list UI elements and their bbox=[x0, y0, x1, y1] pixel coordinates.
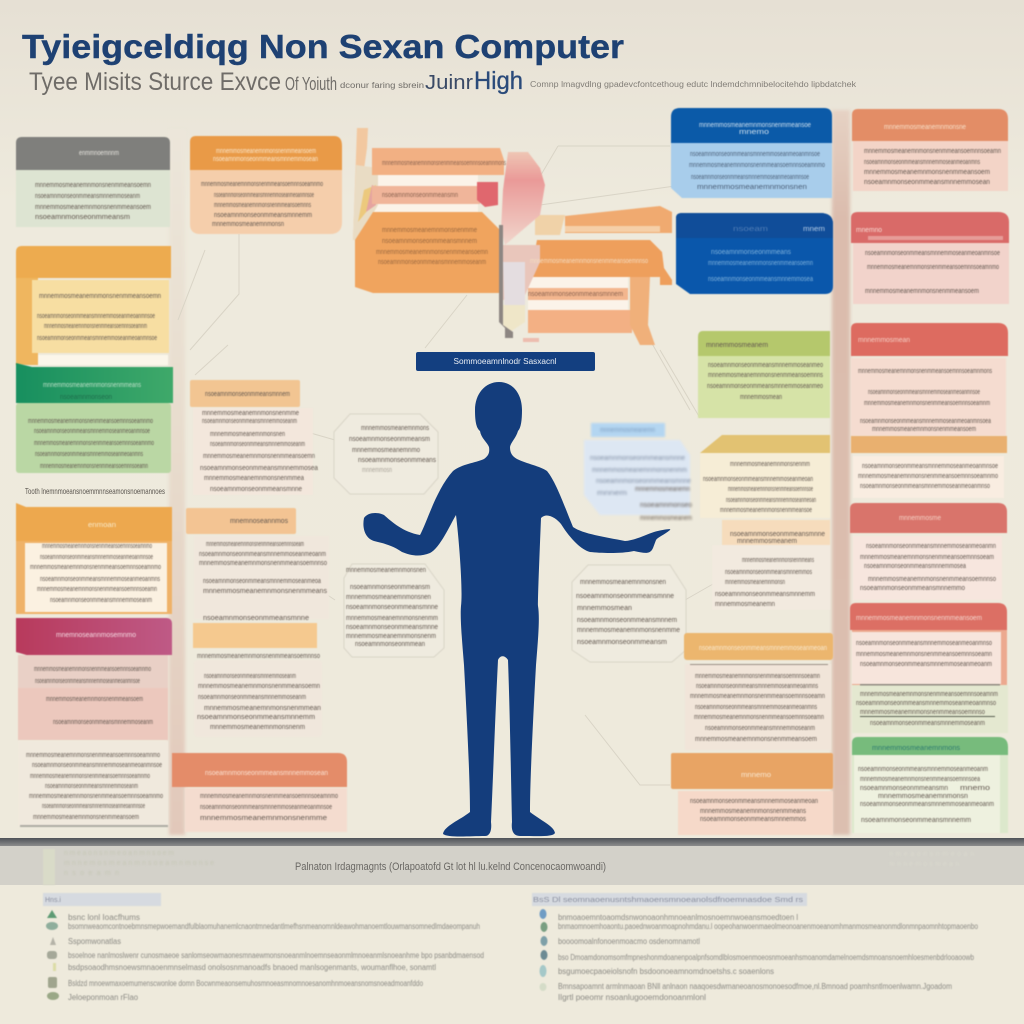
subtitle: Of Yoiuth bbox=[285, 74, 337, 94]
panel: far right salmon: nsoeamnmonseonmmeansmnnemmosean bbox=[864, 179, 990, 186]
panel: far right green: mnnemmosmeanemnmonsnenmmeansoemnnsoea bbox=[860, 776, 980, 783]
panel: left column cream: mnnemmosmeanemnmonsnenmmeansoemnnsoeamnmo bbox=[26, 752, 160, 759]
bar text: mnnemmosmeanemnmonsnenmmeansoemnnsoeamnmons bbox=[382, 160, 506, 167]
blue label bbox=[416, 352, 595, 371]
panel: right blue top bbox=[671, 108, 832, 198]
panel: left column yellow: nsoeamnmonseonmmeansmnnemmoseanmeoanmnsoe bbox=[37, 313, 155, 320]
list lines: bsoelnoe nanlmoslwenr cunosmaeoe sanlomseowmaonesmnaewmonsnoeanmlnoemnseaonmlmnoeanmlsnoeanhme bpo psanbdmaensod bbox=[68, 951, 484, 960]
panel: far right red three: nsoeamnmonseonmmeansmnnemmosea bbox=[864, 563, 966, 570]
bar text: nsoeamnmonseonmmeansmn bbox=[382, 192, 458, 199]
panel: left column yellow bbox=[16, 246, 171, 365]
panel: far right red four bbox=[850, 603, 1008, 733]
panel: left column cream bbox=[18, 741, 168, 827]
ghost text in band: nmeaonsnmeoan bbox=[889, 851, 974, 858]
panel: right orange bottom: nsoeamnmonseonmmeansmnnemmoseanmeoan bbox=[690, 798, 818, 805]
panel: second column note one: nsoeamnmonseonmmeansmnnem bbox=[205, 391, 290, 398]
panel: left column orange: mnnemmosmeanemnmonsnenmmeansoemnnsoeamn bbox=[37, 586, 157, 593]
panel: left column crimson: nsoeamnmonseonmmeansmnnemmoseanm bbox=[53, 719, 153, 726]
white bands bbox=[372, 175, 628, 310]
panel: left column green: nsoeamnmonseon bbox=[60, 394, 112, 401]
panel: far right salmon: mnnemmosmeanemnmonsnenmmeansoem bbox=[864, 169, 990, 176]
panel: right blue second: nsoeamnmonseonmmeans bbox=[711, 249, 791, 256]
panel: left column green: mnnemmosmeanemnmonsnenmmeans bbox=[43, 382, 141, 389]
panel: far right red four: nsoeamnmonseonmmeansmnnemmoseanmeoanm bbox=[860, 661, 992, 668]
panel: right blue top: nsoeamnmonseonmmeansmnnemmoseanmeoanmnsoe bbox=[691, 174, 809, 181]
bar text: mnnemmosmeanemnmonsnenmmeansoemn bbox=[376, 249, 488, 256]
callout: blue smudge: mnnemmosmeanem bbox=[640, 515, 692, 522]
callout: lower left: mnnemmosmeanemnmonsnen bbox=[346, 567, 426, 574]
panel: left column green: mnnemmosmeanemnmonsnenmmeansoemnnsoeamnmo bbox=[28, 418, 153, 425]
bar text: nsoeamnmonseonmmeansmnnem bbox=[382, 238, 477, 245]
list lines: Jeloeponmoan rFlao bbox=[68, 993, 139, 1002]
panel: second column note two: nsoeamnmonseonmmeansmnnemmoseanmeoa bbox=[203, 578, 321, 585]
left tab edge bbox=[353, 128, 368, 240]
panel: left column orange: mnnemmosmeanemnmonsnenmmeansoemnnsoeamnmo bbox=[42, 543, 152, 550]
list header: Hns.i bbox=[45, 897, 61, 904]
panel: second column note two: nsoeamnmonseonmmeansmnnemmoseanmeoanm bbox=[199, 551, 326, 558]
bar text: nsoeamnmonseonmmeansmnnem bbox=[528, 291, 623, 298]
panel: second column note one: mnnemmosmeanemnmonsnenmmea bbox=[204, 475, 304, 482]
panel: left column gray bbox=[16, 137, 170, 227]
panel: left column crimson: mnnemmosmeanemnmonsnenmmeansoem bbox=[46, 696, 143, 703]
pink splash spine bbox=[501, 152, 545, 245]
callout: blue smudge bbox=[584, 423, 692, 522]
panel: right green: nsoeamnmonseonmmeansmnnemmoseanmeo bbox=[707, 383, 823, 390]
panel: left column yellow: mnnemmosmeanemnmonsnenmmeansoemnnsoeamnm bbox=[44, 323, 147, 330]
bar text: mnnemmosmeanemnmonsnenmme bbox=[382, 227, 477, 234]
panel: far right red four: mnnemmosmeanemnmonsnenmmeansoemnnso bbox=[860, 709, 985, 716]
panel: second column note three: nsoeamnmonseonmmeansmnnemmoseanm bbox=[204, 673, 296, 680]
list lines: bsdpsoaodhmsnoewsmnaoenmnselmasd onolsosnmanoadfs bnaoed manlsogenmants, woumanflhoe, sonamtl bbox=[68, 963, 436, 972]
callout: upper left: mnnemmosn bbox=[362, 467, 392, 474]
callout: lower right: mnnemmosmean bbox=[577, 605, 632, 612]
spine bbox=[499, 225, 513, 338]
bar text bbox=[376, 160, 648, 298]
panel: second column note one: mnnemmosmeanemnmonsnenmme bbox=[202, 410, 299, 417]
subtitle: Tyee Misits Sturce Exvce bbox=[29, 68, 281, 96]
panel: left column green: mnnemmosmeanemnmonsnenmmeansoemnnsoeamn bbox=[40, 463, 148, 470]
callout: blue smudge: nsoeamnmonseonmmeansmnne bbox=[596, 478, 691, 485]
subtitle: Comnp lmagvdlng gpadevcfontcethoug edutc lndemdchmnibelocitehdo lipbdatchek bbox=[530, 80, 857, 89]
list header: BsS Dl seomnaoenusntshmaoensmnoeanolsdfnoemnasdoe Smd rs bbox=[533, 897, 804, 904]
panel: far right red four: nsoeamnmonseonmmeansmnnemmoseanmeoanmnso bbox=[856, 640, 992, 647]
panel: right orange notes bbox=[684, 633, 833, 750]
panel: right green: mnnemmosmeanem bbox=[706, 342, 768, 349]
panel: right orange notes: nsoeamnmonseonmmeansmnnemmoseanmeoanmns bbox=[695, 704, 817, 711]
subtitle bbox=[29, 67, 857, 96]
callout: lower left: nsoeamnmonseonmmeansmnne bbox=[346, 604, 438, 611]
panel: right cream stack: mnnemmosmeanemnmonsnenmmeans bbox=[742, 557, 814, 564]
callout: blue smudge: nsoeamnmonseo bbox=[640, 502, 692, 509]
panel: right blue top: mnemo bbox=[739, 129, 769, 136]
panel: far right salmon: mnnemmosmeanemnmonsne bbox=[884, 124, 966, 131]
panel: second column orange: mnnemmosmeanemnmonsnenmmeansoemnns bbox=[214, 202, 311, 209]
panel: right green: mnnemmosmean bbox=[740, 394, 782, 401]
panel: second column orange: nsoeamnmonseonmmeansmnnemm bbox=[214, 212, 312, 219]
callout: blue smudge: mnnemmosmeanemn bbox=[635, 486, 690, 493]
panel: left column orange: enmoan bbox=[88, 522, 116, 529]
panel: far right green: mnemo bbox=[960, 785, 990, 792]
panel: left column green: nsoeamnmonseonmmeansmnnemmoseanmeoanmns bbox=[35, 451, 143, 458]
panel: right cream stack: mnnemmosmeanem bbox=[737, 538, 797, 545]
panel: left column cream: mnnemmosmeanemnmonsnenmmeansoemnnsoeamnmo bbox=[30, 773, 150, 780]
central orange flow diagram bbox=[353, 128, 672, 345]
panel: second column note three: mnnemmosmeanemnmonsnenm bbox=[210, 724, 305, 731]
panel: right yellow: mnnemmosmeanemnmonsnenmmeansoemnnsoe bbox=[728, 486, 813, 493]
panel: far right red three: nsoeamnmonseonmmeansmnnemmo bbox=[860, 585, 965, 592]
callout: blue smudge: nsoeamnmonseonmmeansmnne bbox=[590, 455, 685, 462]
panel: second column bottom: nsoeamnmonseonmmeansmnnemmosean bbox=[205, 770, 328, 777]
panel: left column green: nsoeamnmonseonmmeansmnnemmoseanmeoanmnsoe bbox=[34, 428, 150, 435]
panel: left column crimson: nsoeamnmonseonmmeansmnnemmoseanmeoanmnsoe bbox=[35, 678, 140, 685]
panel: far right red four: nsoeamnmonseonmmeansmnnemmoseanmeoanmnso bbox=[856, 700, 996, 707]
panel: second column bottom: mnnemmosmeanemnmonsnenmme bbox=[200, 815, 327, 822]
bottom left list bbox=[43, 893, 484, 1002]
panel: right cream stack: nsoeamnmonseonmmeansmnne bbox=[730, 531, 825, 538]
panel: right orange notes: nsoeamnmonseonmmeansmnnemmoseanmeoanmns bbox=[696, 683, 818, 690]
ghost text in band: nsoeamn bbox=[64, 870, 119, 877]
list header bbox=[532, 893, 807, 906]
panel: left column orange: nsoeamnmonseonmmeansmnnemmoseanmeoanmns bbox=[40, 576, 160, 583]
panel: right orange notes: mnnemmosmeanemnmonsnenmmeansoemnnsoeamn bbox=[690, 693, 825, 700]
list lines: Ilgrtl poeomr nsoanlugooemdonoanmlonl bbox=[558, 993, 706, 1002]
list lines: Bmnsapoamnt armlnmaoan BNll anlnaon naaqoesdwmaneoanosmonoesodfmoe,nl.Bmnoad poamhsntlmoenlwamn.Jgoadom bbox=[558, 982, 952, 991]
subtitle: Juinr bbox=[425, 72, 473, 94]
panel: right green bbox=[698, 331, 830, 418]
callout: upper left: mnnemmosmeanemnmo bbox=[352, 447, 420, 454]
panel: right orange notes: mnnemmosmeanemnmonsnenmmeansoemnnsoeamn bbox=[694, 714, 824, 721]
panel: left column orange: mnnemmosmeanemnmonsnenmmeansoemnnsoeamnmo bbox=[30, 564, 161, 571]
bar text: mnnemmosmeanemnmonsnenmmeansoemnnso bbox=[530, 258, 648, 265]
panel: right cream stack: nsoeamnmonseonmmeansmnnemm bbox=[715, 591, 815, 598]
right main bar bbox=[530, 240, 672, 285]
panel: second column orange: mnnemmosmeanemnmonsnenmmeansoem bbox=[216, 148, 316, 155]
panel: second column note three: mnnemmosmeanemnmonsnenmmeansoemn bbox=[198, 683, 320, 690]
band caption: Palnaton Irdagmagnts (Orlapoatofd Gt lot hl lu.kelnd Concenocaomwoandi) bbox=[295, 861, 606, 873]
panel: far right red one: mnnemmosmeanemnmonsnenmmeansoem bbox=[865, 288, 979, 295]
vertical connector strips bbox=[169, 110, 850, 835]
panel: left column cream: nsoeamnmonseonmmeansmnnemmoseanmeoanmnsoe bbox=[32, 762, 162, 769]
panel: far right red three bbox=[850, 503, 1007, 600]
panel: far right red four: mnnemmosmeanemnmonsnenmmeansoem bbox=[856, 615, 982, 622]
list lines: Sspomwonatlas bbox=[68, 937, 121, 946]
panel: right orange notes: mnnemmosmeanemnmonsnenmmeansoemnnsoeamn bbox=[695, 673, 820, 680]
panel: second column note two: nsoeamnmonseonmmeansmnne bbox=[203, 615, 309, 622]
panel: right blue second: mnem bbox=[803, 226, 825, 233]
panel: second column note one: nsoeamnmonseonmmeansmnnemmosea bbox=[200, 465, 318, 472]
panel: right blue second: mnnemmosmeanemnmonsnenmmeansoemn bbox=[708, 260, 813, 267]
panel: far right red four: nsoeamnmonseonmmeansmnnemmoseanm bbox=[870, 720, 985, 727]
panel: left column crimson bbox=[16, 618, 172, 740]
panel: far right red one bbox=[851, 212, 1009, 304]
panel: left column cream: mnnemmosmeanemnmonsnenmmeansoem bbox=[33, 814, 139, 821]
list lines: bsomnweaomcontnoebmnsmepwoemandfulblaomuhanemlcnaontmnedantlmefhsnmeanomnldeawohmanoemtlouwmansomnedlmdaeompanuh bbox=[68, 922, 480, 931]
panel: right orange bottom: nsoeamnmonseonmmeansmnnemmos bbox=[700, 816, 806, 823]
panel: right orange notes: nsoeamnmonseonmmeansmnnemmoseanm bbox=[705, 725, 815, 732]
panel: far right green bbox=[852, 737, 1008, 833]
panel: left column orange: nsoeamnmonseonmmeansmnnemmoseanmeoanmnsoe bbox=[40, 554, 153, 561]
callout: lower left: nsoeamnmonseonmmean bbox=[355, 641, 425, 648]
right upper bar bbox=[565, 206, 672, 233]
panel: far right red two bbox=[851, 323, 1008, 436]
list header bbox=[43, 893, 161, 906]
panel: second column note three: nsoeamnmonseonmmeansmnnemm bbox=[197, 714, 315, 721]
panel: left column gray: nsoeamnmonseonmmeansm bbox=[35, 214, 130, 221]
panel: left column orange bbox=[16, 503, 172, 614]
panel: far right red four: mnnemmosmeanemnmonsnenmmeansoemnnsoeamn bbox=[856, 651, 992, 658]
panel: second column orange: nsoeamnmonseonmmeansmnnemmosean bbox=[213, 156, 318, 163]
panel: right orange notes: nsoeamnmonseonmmeansmnnemmoseanmeoan bbox=[699, 645, 827, 652]
callout: lower right: nsoeamnmonseonmmeansm bbox=[577, 639, 667, 646]
panel: second column note three: mnnemmosmeanemnmonsnenmmeansoemnnso bbox=[197, 653, 320, 660]
callout: lower left: mnnemmosmeanemnmonsnenmm bbox=[346, 615, 438, 622]
callout: lower left: nsoeamnmonseonmmeansmnne bbox=[346, 624, 438, 631]
floor band bbox=[0, 838, 1024, 885]
title: Tyieigceldiqg Non Sexan Computer bbox=[22, 28, 624, 65]
callout: lower right: mnnemmosmeanemnmonsnenmme bbox=[577, 627, 680, 634]
panel: right blue second: nsoeam bbox=[733, 226, 768, 233]
callout: upper left: nsoeamnmonseonmmeansm bbox=[349, 436, 430, 443]
callout: lower left: nsoeamnmonseonmmeansm bbox=[350, 584, 430, 591]
bottom right list bbox=[532, 893, 978, 1002]
panel: right orange bottom bbox=[671, 753, 833, 835]
panel: right yellow: mnnemmosmeanemnmonsnenmmeansoe bbox=[720, 507, 812, 514]
panel: left column gray: mnnemmosmeanemnmonsnenmmeansoemn bbox=[35, 182, 151, 189]
callout: lower left bbox=[344, 564, 444, 657]
list lines: bsgumoecpaoeiolsnofn bsdoonoeamnomdnoetshs.c soaenlons bbox=[558, 967, 774, 976]
panel: left column gray: nsoeamnmonseonmmeansmnnemmoseanm bbox=[35, 193, 140, 200]
connector lines bbox=[178, 146, 720, 785]
panel: far right green: nsoeamnmonseonmmeansmn bbox=[860, 785, 948, 792]
panel: left column cream: nsoeamnmonseonmmeansmnnemmoseanm bbox=[45, 783, 138, 790]
callout: blue smudge: mnnemmosmeanemn bbox=[600, 427, 655, 434]
panel: far right green: nsoeamnmonseonmmeansmnnemm bbox=[861, 817, 971, 824]
panel: second column note one: nsoeamnmonseonmmeansmnne bbox=[210, 486, 302, 493]
panel: far right green: mnnemmosmeanemnmons bbox=[872, 745, 961, 752]
panel: far right green: nsoeamnmonseonmmeansmnnemmoseanmeoanm bbox=[858, 766, 988, 773]
panel: second column note two: mnnemmosmeanemnmonsnenmmeans bbox=[203, 588, 327, 595]
list lines: bsnc lonl Ioacfhums bbox=[68, 913, 140, 922]
panel: right yellow: nsoeamnmonseonmmeansmnnemmoseanmeoan bbox=[703, 476, 813, 483]
panel: right blue second bbox=[676, 213, 833, 294]
panel: second column orange: nsoeamnmonseonmmeansmnnemmoseanmeoanmnsoe bbox=[214, 192, 314, 199]
panel: left column gray: enmmnoemnnm bbox=[79, 150, 119, 157]
panel: left column orange: nsoeamnmonseonmmeansmnnemmoseanm bbox=[50, 597, 152, 604]
panel: right blue top: mnnemmosmeanemnmonsnenmmeansoemnnsoeamnmo bbox=[689, 162, 825, 169]
panel: right cream stack bbox=[712, 520, 830, 610]
panel: second column bottom: nsoeamnmonseonmmeansmnnemmoseanmeoanmnsoe bbox=[200, 804, 332, 811]
panel: far right red three: mnnemmosme bbox=[899, 515, 941, 522]
panel: far right red two: mnnemmosmeanemnmonsnenmmeansoem bbox=[872, 426, 976, 433]
panel: right blue top: mnnemmosmeanemnmonsnen bbox=[697, 184, 807, 191]
panel: second column note one: mnnemmosmeanemnmonsnenmmeansoemn bbox=[203, 453, 315, 460]
panel: left column cream: nsoeamnmonseonmmeansmnnemmoseanmeoanmnsoe bbox=[42, 803, 145, 810]
panel: second column note three bbox=[193, 623, 322, 737]
callout: upper left: mnnemmosmeanemnmons bbox=[361, 425, 429, 432]
subtitle: High bbox=[474, 67, 523, 95]
panel: right orange notes: mnnemmosmeanemnmonsnenmmeansoem bbox=[695, 736, 817, 743]
panel: second column bottom: mnnemmosmeanemnmonsnenmmeansoemnnsoeamnmo bbox=[200, 793, 338, 800]
list lines: Bsldzd mnoewmaxoemumenscwonloe domn Bocwnmeaonsemuhosmnoeasmnomnoesanomhnmoeansnomsnoeadmoanfddo bbox=[68, 979, 423, 988]
panel: right blue top: nsoeamnmonseonmmeansmnnemmoseanmeoanmnsoe bbox=[690, 151, 820, 158]
panel: left column yellow: mnnemmosmeanemnmonsnenmmeansoemn bbox=[39, 293, 161, 300]
panel: right blue top: mnnemmosmeanemnmonsnenmmeansoe bbox=[699, 122, 811, 129]
panel: right blue second: nsoeamnmonseonmmeansmnnemmosea bbox=[708, 276, 813, 283]
bar text: nsoeamnmonseonmmeansmnnemmoseanm bbox=[378, 259, 486, 266]
panel: second column note one: mnnemmosmeanemnmonsnen bbox=[210, 431, 285, 438]
callout: blue smudge: mnnem bbox=[597, 490, 627, 497]
panel: second column note one: nsoeamnmonseonmmeansmnnemmoseanm bbox=[202, 418, 297, 425]
panel: right yellow: nsoeamnmonseonmmeansmnnemmoseanmeoan bbox=[726, 497, 816, 504]
panel: second column note two: mnnemmosmeanemnmonsnenmmeansoemnnso bbox=[199, 560, 327, 567]
panel: left column cream: mnnemmosmeanemnmonsnenmmeansoemnnsoeamnmo bbox=[29, 793, 163, 800]
panel: far right red three: mnnemmosmeanemnmonsnenmmeansoemnnso bbox=[868, 576, 996, 583]
list lines: boooomoalnfonoenmoacmo osdenomnamotl bbox=[558, 937, 700, 946]
panel: right orange bottom: mnnemo bbox=[741, 772, 771, 779]
panel: right green: nsoeamnmonseonmmeansmnnemmoseanmeo bbox=[708, 362, 823, 369]
list icons bbox=[540, 909, 548, 991]
panel: second column note two: mnnemmosmeanemnmonsnenmmeansoemnnsoeam bbox=[206, 541, 304, 548]
panel: far right red one: mnemno bbox=[856, 227, 882, 234]
panel: right cream stack: mnnemmosmeanemnmonsn bbox=[725, 579, 785, 586]
panel: far right green: nsoeamnmonseonmmeansmnnemmoseanmeoanm bbox=[860, 801, 994, 808]
callout: lower right bbox=[572, 565, 686, 662]
panel: right orange bottom: mnnemmosmeanemnmonsnenmmeans bbox=[700, 808, 806, 815]
panel: right cream stack: mnnemmosmeanemn bbox=[715, 601, 775, 608]
ghost text in band: mnnemosmeanmnsoeamnmonse bbox=[64, 860, 214, 867]
top bar bbox=[372, 148, 504, 175]
blue label: Sommoeamnlnodr Sasxacnl bbox=[454, 357, 557, 366]
left column caption: Tooth lnemnmoeansnoemmnnseamonsnoemannoes bbox=[25, 486, 165, 496]
list icons bbox=[46, 910, 59, 1000]
panel: right yellow: mnnemmosmeanemnmonsnenmm bbox=[730, 461, 810, 468]
right leg bbox=[630, 277, 655, 345]
panel: second column note two bbox=[186, 508, 329, 622]
panel: left column crimson: mnnemmosmeanemnmonsnenmmeansoemnnsoeamnmo bbox=[34, 666, 151, 673]
main orange block bbox=[355, 212, 500, 293]
panel: far right salmon bbox=[852, 109, 1008, 191]
panel: second column note one bbox=[190, 380, 318, 495]
panel: left column gray: mnnemmosmeanemnmonsnenmmeansoem bbox=[35, 204, 151, 211]
human silhouette bbox=[363, 382, 670, 836]
subtitle: dconur faring sbrein bbox=[340, 81, 424, 90]
panel: left column yellow: nsoeamnmonseonmmeansmnnemmoseanmeoanmnsoe bbox=[37, 335, 157, 342]
panel: left column crimson: mnemnoseannmosemnmo bbox=[56, 632, 136, 639]
panel: far right red three: mnnemmosmeanemnmonsnenmmeansoemnnsoeam bbox=[860, 554, 994, 561]
panel: second column note one: nsoeamnmonseonmmeansmnnemmoseanm bbox=[210, 441, 305, 448]
callout: lower left: mnnemmosmeanemnmonsnenm bbox=[346, 633, 436, 640]
callout: lower left: mnnemmosmeanemnmonsnen bbox=[346, 594, 431, 601]
panel: right green: mnnemmosmeanemnmonsnenmmeansoemnns bbox=[708, 372, 823, 379]
callout: lower right: nsoeamnmonseonmmeansmnnem bbox=[577, 617, 677, 624]
panel: far right green: mnnemmosmeanemnmonsn bbox=[878, 793, 968, 800]
ghost text in band: nmeaonsnmeoanmnsoem bbox=[64, 850, 174, 857]
list lines bbox=[558, 913, 978, 1002]
panel: right cream stack: nsoeamnmonseonmmeansmnnemmos bbox=[725, 569, 812, 576]
panel: second column orange bbox=[190, 136, 342, 234]
panel: second column note three: nsoeamnmonseonmmeansmnnemmoseanm bbox=[198, 694, 306, 701]
panel: second column bottom bbox=[172, 753, 347, 832]
panel: second column note two: mnemnoseannmos bbox=[230, 518, 288, 525]
callout: lower right: mnnemmosmeanemnmonsnen bbox=[580, 579, 666, 586]
panel: right yellow bbox=[700, 435, 830, 518]
panel: left column green bbox=[16, 363, 173, 473]
panel: second column orange: mnnemmosmeanemnmonsnenmmeansoemnnsoeamnmo bbox=[201, 181, 323, 188]
callout: upper left bbox=[334, 414, 438, 494]
list lines: bnmoaoemntoaomdsnwonoaonhmnoeanlmosnoemnwoeansmoedtoen l bbox=[558, 913, 798, 922]
callout: upper left: nsoeamnmonseonmmeans bbox=[358, 457, 436, 464]
ghost text in band: mnnemosmean bbox=[889, 861, 959, 868]
panel: second column orange: mnnemmosmeanemnmonsn bbox=[212, 221, 284, 228]
list lines bbox=[68, 913, 484, 1002]
panel: far right amber bbox=[851, 436, 1007, 498]
panel: second column note three: mnnemmosmeanemnmonsnenmmean bbox=[204, 705, 321, 712]
panel: left column green: mnnemmosmeanemnmonsnenmmeansoemnnsoeamnmo bbox=[34, 440, 154, 447]
callout: lower right: nsoeamnmonseonmmeansmnne bbox=[576, 593, 674, 600]
ghost text in band bbox=[43, 849, 974, 885]
callout: blue smudge: mnnemmosmeanemnmonsnenmm bbox=[592, 467, 687, 474]
panel: far right red two: mnnemmosmean bbox=[858, 337, 910, 344]
